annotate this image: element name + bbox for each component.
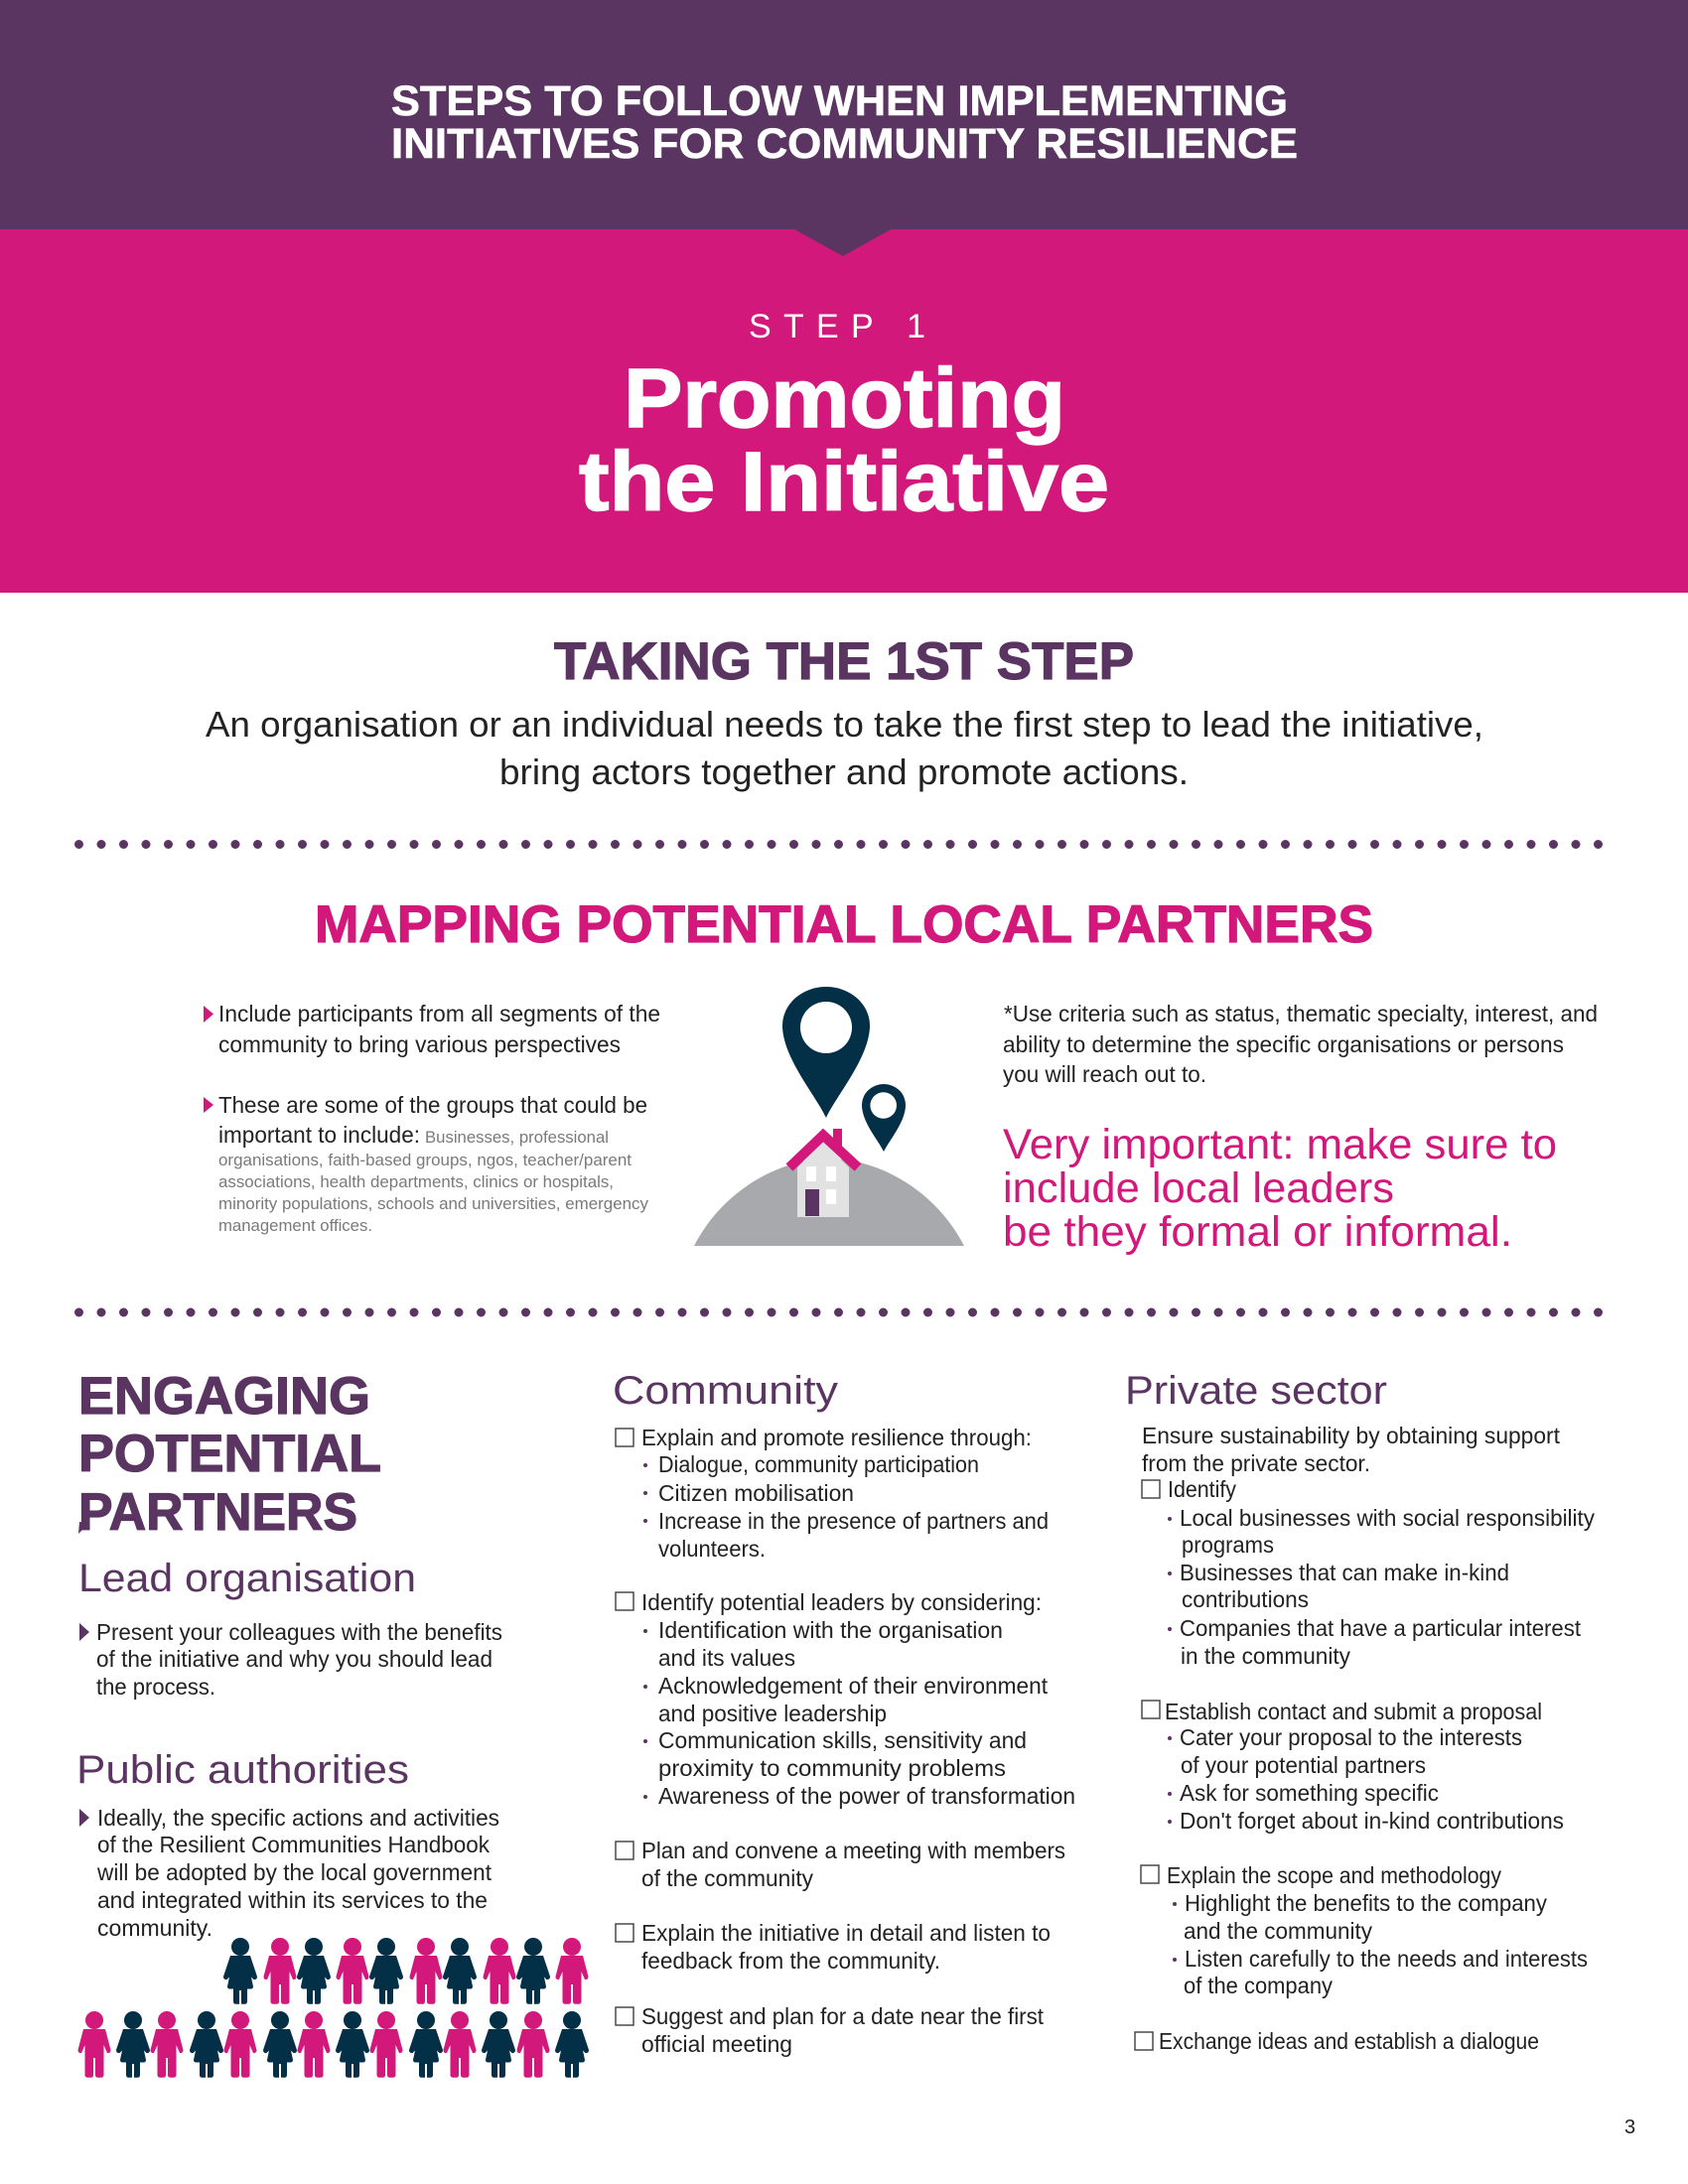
checklist: private sector: Identify — [1168, 1476, 1236, 1502]
checklist: community: Explain the initiative in detail and listen to — [641, 1920, 1051, 1946]
left bullets: important to include: — [218, 1122, 420, 1148]
checklist: private sector: Companies that have a particular interest — [1180, 1615, 1582, 1641]
main title: INITIATIVES FOR COMMUNITY RESILIENCE — [391, 120, 1298, 168]
checklist: private sector: Highlight the benefits to the company — [1185, 1890, 1547, 1916]
subheading: public authorities: Public authorities — [76, 1748, 409, 1792]
main title: STEPS TO FOLLOW WHEN IMPLEMENTING — [391, 77, 1288, 125]
text: lead organisation: the process. — [96, 1674, 215, 1700]
right note — [1003, 1001, 1598, 1087]
checklist: private sector: in the community — [1181, 1643, 1350, 1669]
left bullets: associations, health departments, clinics or hospitals, — [218, 1173, 614, 1191]
left bullets: organisations, faith-based groups, ngos, teacher/parent — [218, 1152, 632, 1169]
callout: local leaders: Very important: make sure to — [1003, 1121, 1557, 1168]
step banner: magenta — [0, 228, 1688, 593]
checklist: private sector: Listen carefully to the needs and interests — [1185, 1946, 1588, 1972]
text: public authorities: Ideally, the specific actions and activities — [97, 1805, 499, 1831]
heading: MAPPING POTENTIAL LOCAL PARTNERS — [315, 895, 1373, 954]
text: public authorities — [79, 1805, 499, 1941]
heading: ENGAGING — [78, 1367, 370, 1426]
text: public authorities: and integrated within its services to the — [97, 1887, 488, 1913]
text: public authorities: will be adopted by the local government — [96, 1859, 492, 1885]
notch arrow — [792, 228, 893, 256]
text: lead organisation: Present your colleagues with the benefits — [96, 1619, 502, 1645]
step title: the Initiative — [579, 435, 1109, 528]
column: community — [613, 1369, 1075, 2057]
main title — [391, 77, 1298, 168]
checklist: private sector: from the private sector. — [1142, 1450, 1370, 1476]
intro text: bring actors together and promote actions. — [499, 751, 1189, 792]
checklist: community: Identify potential leaders by considering: — [641, 1589, 1042, 1615]
left bullets — [204, 1001, 660, 1235]
checklist: private sector: programs — [1182, 1532, 1274, 1558]
left bullets: minority populations, schools and universities, emergency — [218, 1195, 649, 1213]
checklist: private sector — [1135, 1423, 1595, 2054]
text: lead organisation — [79, 1619, 502, 1700]
page number: 3 — [1624, 2116, 1635, 2138]
checklist: community: and positive leadership — [658, 1701, 887, 1726]
callout: local leaders: include local leaders — [1003, 1164, 1394, 1212]
checklist: community: Communication skills, sensitivity and — [658, 1727, 1027, 1753]
left bullets: Businesses, professional — [425, 1129, 609, 1147]
checklist: community: Identification with the organisation — [658, 1617, 1003, 1643]
step label: STEP 1 — [749, 308, 925, 345]
checklist: private sector: Local businesses with social responsibility — [1180, 1505, 1595, 1531]
checklist: private sector: Ensure sustainability by obtaining support — [1142, 1423, 1561, 1448]
left bullets: community to bring various perspectives — [218, 1031, 621, 1057]
checklist: private sector: contributions — [1182, 1586, 1309, 1612]
right note: ability to determine the specific organisations or persons — [1003, 1031, 1564, 1057]
step title: Promoting — [624, 351, 1065, 445]
left bullets: Include participants from all segments of the — [218, 1001, 660, 1026]
checklist: community: feedback from the community. — [641, 1948, 940, 1974]
callout: local leaders: be they formal or informal. — [1003, 1208, 1512, 1256]
checklist: private sector: Ask for something specific — [1180, 1780, 1439, 1806]
checklist: private sector: and the community — [1184, 1918, 1372, 1944]
step title — [579, 351, 1109, 528]
intro text: An organisation or an individual needs to take the first step to lead the initiative, — [206, 704, 1483, 745]
callout: local leaders — [1003, 1121, 1557, 1256]
text: public authorities: community. — [97, 1915, 212, 1941]
checklist: private sector: Explain the scope and methodology — [1167, 1862, 1501, 1888]
checklist: community: Increase in the presence of partners and — [658, 1508, 1049, 1534]
checklist: community: proximity to community problems — [658, 1755, 1006, 1781]
icon: rows of people — [77, 1938, 589, 2078]
text: public authorities: of the Resilient Communities Handbook — [97, 1832, 490, 1857]
checklist: community: Suggest and plan for a date near the first — [641, 2003, 1045, 2029]
text: lead organisation: of the initiative and why you should lead — [96, 1646, 492, 1672]
heading: PARTNERS — [78, 1483, 357, 1542]
checklist: private sector: Establish contact and submit a proposal — [1165, 1699, 1542, 1724]
right note: *Use criteria such as status, thematic specialty, interest, and — [1004, 1001, 1598, 1026]
subheading: private sector: Private sector — [1125, 1369, 1387, 1413]
checklist: private sector: Businesses that can make in-kind — [1180, 1560, 1509, 1585]
header band: purple — [0, 0, 1688, 229]
section: mapping potential local partners — [204, 895, 1598, 1256]
intro text — [206, 704, 1483, 792]
right note: you will reach out to. — [1003, 1061, 1206, 1087]
checklist: community: Dialogue, community participation — [658, 1451, 979, 1477]
heading — [78, 1367, 381, 1542]
checklist: private sector: Cater your proposal to the interests — [1180, 1724, 1522, 1750]
checklist: community: Acknowledgement of their environment — [658, 1673, 1049, 1699]
subheading: community: Community — [613, 1369, 838, 1413]
checklist: community: and its values — [658, 1645, 795, 1671]
checklist: private sector: of your potential partners — [1181, 1752, 1426, 1778]
checklist: community: of the community — [641, 1865, 813, 1891]
checklist: community: Awareness of the power of transformation — [658, 1783, 1075, 1809]
checklist: community: Citizen mobilisation — [658, 1480, 854, 1506]
subheading: lead organisation: Lead organisation — [78, 1557, 416, 1600]
checklist: community: Plan and convene a meeting with members — [641, 1838, 1065, 1863]
checklist: private sector: Exchange ideas and establish a dialogue — [1159, 2028, 1539, 2054]
checklist: community: official meeting — [641, 2031, 792, 2057]
column: engaging potential partners — [76, 1367, 589, 2078]
heading: TAKING THE 1ST STEP — [554, 632, 1134, 691]
checklist: community: Explain and promote resilience through: — [641, 1425, 1032, 1450]
left bullets: These are some of the groups that could be — [218, 1092, 647, 1118]
left bullets: management offices. — [218, 1217, 372, 1235]
checklist: private sector: Don't forget about in-kind contributions — [1180, 1808, 1564, 1834]
checklist: private sector: of the company — [1184, 1973, 1333, 1998]
heading: POTENTIAL — [78, 1425, 381, 1483]
section: taking the first step — [206, 632, 1483, 792]
icon: map pins over house on hill — [694, 987, 964, 1246]
checklist: community: volunteers. — [658, 1536, 766, 1562]
column: private sector — [1125, 1369, 1595, 2054]
checklist: community — [616, 1425, 1075, 2057]
